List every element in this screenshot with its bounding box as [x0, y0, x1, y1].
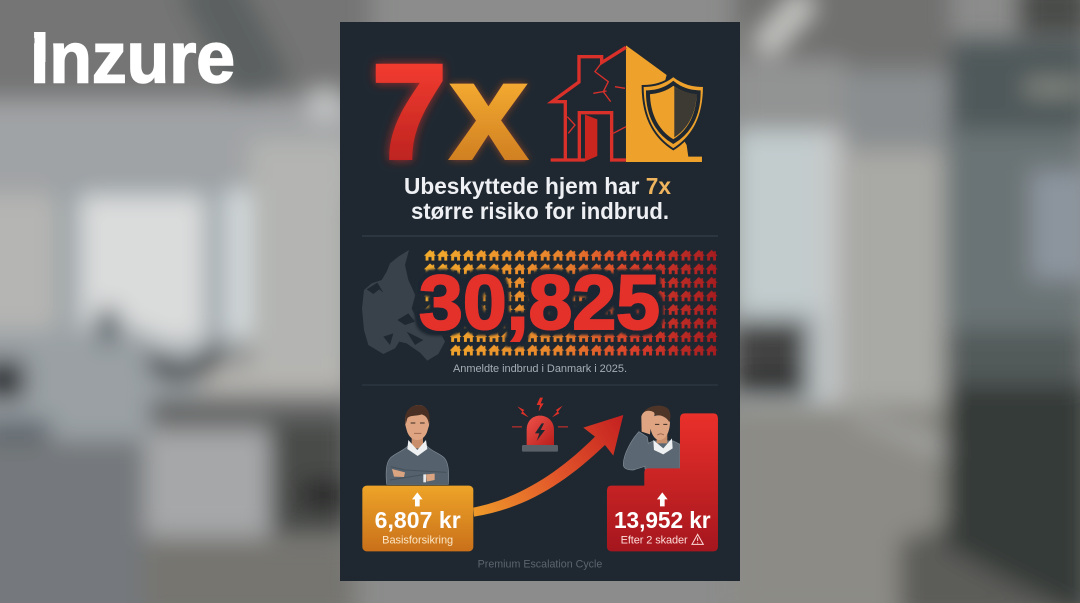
panel: infographic card [340, 22, 740, 581]
heading text: risk statement [404, 173, 671, 224]
cracks [567, 63, 626, 133]
icon: broken house with shield [551, 45, 704, 162]
box: price after two claims: Efter 2 skader [621, 535, 688, 547]
box: price after two claims: 13,952 kr [614, 507, 711, 533]
caption: reported burglaries: Anmeldte indbrud i Danmark i 2025. [453, 363, 627, 375]
heading: 7x: 7 [372, 38, 447, 187]
heading text: risk statement: større risiko for indbrud. [411, 198, 669, 224]
heading: 7x [372, 34, 527, 188]
map: Denmark [362, 250, 445, 361]
logo: inzure: inzure [30, 18, 235, 98]
box: basic insurance price: Basisforsikring [382, 534, 453, 546]
icon: alarm siren [512, 398, 568, 452]
big number: 30,825: 30,825 [419, 260, 660, 346]
house protected half [626, 45, 702, 162]
person: calm man with crossed arms [386, 405, 449, 484]
arrow: premium escalation [473, 415, 623, 517]
chart: house pictogram grid [423, 249, 718, 358]
door [585, 115, 597, 161]
icon: warning triangle [692, 534, 703, 544]
box: basic insurance price [362, 486, 473, 551]
logo: inzure [34, 32, 234, 84]
shield [643, 76, 704, 149]
box: basic insurance price: 6,807 kr [375, 507, 461, 533]
heading: 7x: x [450, 34, 527, 188]
person: worried man holding head [623, 406, 680, 470]
box: price after two claims [607, 413, 718, 551]
heading text: risk statement: Ubeskyttede hjem har 7x [404, 173, 671, 199]
house broken half outline [551, 47, 626, 160]
caption: premium escalation cycle: Premium Escalation Cycle [478, 559, 602, 571]
